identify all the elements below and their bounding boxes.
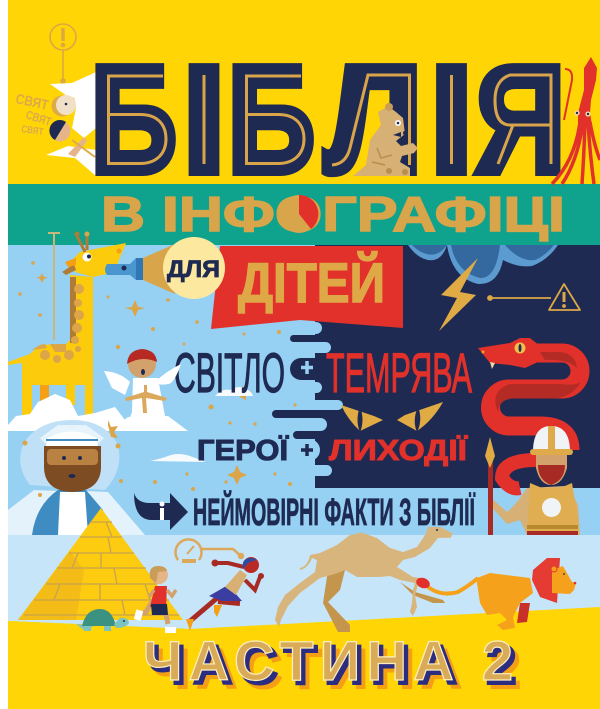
title БІБЛІЯ: І bbox=[430, 34, 472, 204]
title БІБЛІЯ: Б bbox=[91, 34, 176, 204]
circle ДЛЯ bbox=[163, 237, 225, 299]
word ЛИХОДІЇ: ЛИХОДІЇ bbox=[329, 434, 468, 467]
bear bbox=[353, 103, 418, 176]
cat eyes bbox=[341, 402, 443, 431]
stars bbox=[18, 261, 297, 491]
cloud under giraffe bbox=[8, 394, 125, 431]
title БІБЛІЯ: І bbox=[183, 34, 225, 204]
marker pen bbox=[105, 244, 175, 294]
word ТЕМРЯВА: ТЕМРЯВА bbox=[326, 341, 472, 404]
warning icon top left bbox=[50, 24, 76, 83]
heading ЧАСТИНА 2: ЧАСТИНА 2 bbox=[147, 633, 517, 696]
falling angels bbox=[46, 72, 96, 176]
snake bbox=[478, 338, 581, 488]
storm cloud bbox=[408, 245, 558, 284]
ground edge repaint bbox=[8, 621, 240, 640]
lion bbox=[415, 558, 576, 630]
word СВІТЛО: СВІТЛО bbox=[174, 341, 285, 404]
turtle bbox=[76, 609, 129, 631]
small clouds bbox=[150, 387, 253, 462]
central angel bbox=[104, 349, 188, 431]
warning sign bbox=[488, 284, 580, 310]
lightning bolt bbox=[439, 258, 478, 331]
word СВЯТ repeated: СВЯТ bbox=[14, 90, 50, 113]
word ГЕРОЇ: ГЕРОЇ bbox=[197, 434, 289, 467]
squid bbox=[552, 57, 600, 184]
camel bbox=[275, 527, 453, 632]
subtitle В ІНФОГРАФІЦІ: В ІНФОГРАФІЦІ bbox=[101, 188, 565, 242]
sky panel bbox=[8, 245, 600, 536]
pie chart letter О bbox=[280, 195, 318, 233]
title БІБЛІЯ: Я bbox=[476, 34, 565, 204]
label ДЛЯ: ДЛЯ bbox=[167, 256, 220, 283]
word СВЯТ repeated bbox=[14, 90, 54, 138]
giraffe bbox=[8, 232, 126, 417]
speedometer bbox=[176, 539, 243, 561]
ground bbox=[8, 607, 600, 709]
child runner bbox=[134, 566, 176, 633]
arrow info icon bbox=[134, 493, 188, 530]
heading ЧАСТИНА 2: ЧАСТИНА 2 bbox=[143, 629, 513, 692]
measuring rod bbox=[48, 233, 60, 340]
title gold inline bbox=[108, 75, 551, 165]
heading ЧАСТИНА 2: ЧАСТИНА 2 bbox=[151, 637, 521, 700]
dark night panel bbox=[272, 245, 600, 488]
lower sky band bbox=[8, 535, 600, 635]
teal title band bbox=[8, 184, 600, 245]
title БІБЛІЯ: Л bbox=[325, 34, 422, 204]
pyramid bbox=[18, 508, 183, 620]
title БІБЛІЯ: Б bbox=[228, 34, 315, 204]
sprinter bbox=[186, 557, 264, 631]
Moses figure bbox=[8, 420, 145, 535]
word СВЯТ repeated: СВЯТ bbox=[24, 108, 54, 129]
red banner bbox=[211, 246, 403, 329]
warrior bbox=[485, 426, 580, 535]
heading ДІТЕЙ: ДІТЕЙ bbox=[238, 251, 385, 314]
title БІБЛІЯ bbox=[91, 34, 565, 204]
word СВЯТ repeated: СВЯТ bbox=[21, 124, 44, 138]
plus signs bbox=[301, 361, 313, 456]
